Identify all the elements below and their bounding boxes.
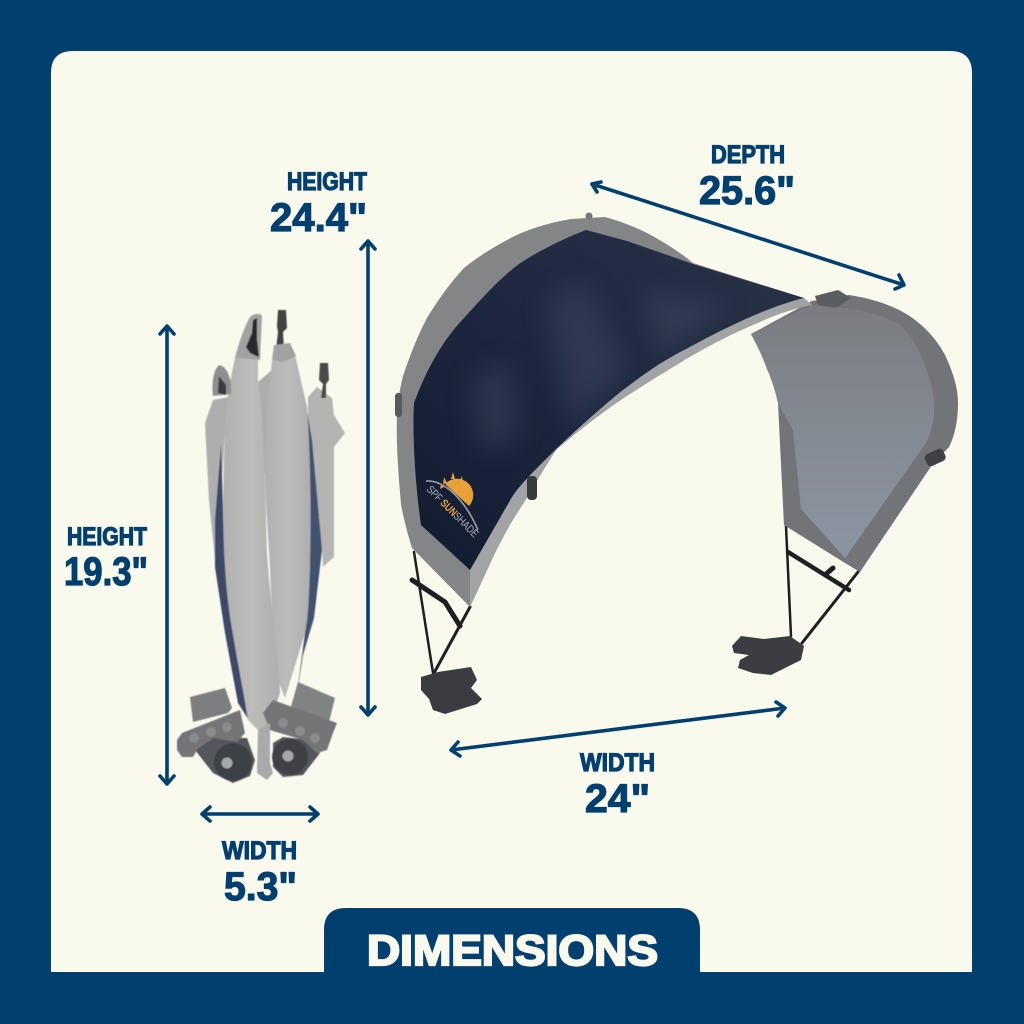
right foot clamp [732, 636, 804, 675]
rear leg [802, 572, 858, 643]
front leg [414, 552, 433, 673]
right main fabric strip [265, 355, 311, 698]
right paddle [290, 682, 335, 730]
arrow: depth [592, 182, 904, 289]
label: folded height: 19.3" [64, 550, 148, 594]
lower front knob [527, 476, 537, 500]
label: folded height [64, 523, 148, 594]
dark navy panel [413, 230, 804, 570]
arrow: folded width [202, 807, 318, 821]
left axle [222, 758, 232, 768]
label: open height: 24.4" [270, 196, 367, 240]
label: open width [580, 749, 655, 821]
right side knob [923, 447, 947, 468]
left wheel housing [195, 738, 255, 783]
left clamp bar [177, 710, 245, 757]
label: open width: WIDTH [580, 749, 655, 777]
label: open width: 24" [585, 777, 650, 821]
left navy lining [215, 445, 250, 722]
lower edge highlight [470, 298, 812, 607]
left canopy gray border [397, 217, 812, 607]
clamps and wheels [177, 682, 337, 783]
right axle [282, 750, 294, 762]
label: folded width: WIDTH [222, 837, 297, 865]
left side knob [395, 393, 402, 417]
label: open height [270, 168, 367, 240]
logo swoosh [426, 481, 478, 530]
clamp teeth [189, 718, 320, 743]
brace [788, 552, 849, 590]
arrow: folded height [160, 326, 174, 784]
title text: DIMENSIONS [367, 927, 658, 975]
back centre fabric strip [258, 370, 272, 480]
right canopy panel inner [751, 305, 934, 558]
zipper pull right [319, 363, 329, 398]
arrow: open width [451, 702, 785, 756]
label: depth: 25.6" [699, 169, 795, 213]
brand logo [424, 472, 480, 540]
logo rays [440, 472, 468, 492]
title tab [324, 908, 700, 975]
right navy lining [296, 405, 322, 700]
back left fabric strip [205, 397, 228, 570]
left small cap [212, 365, 231, 396]
left main fabric strip [223, 358, 280, 730]
back right fabric strip [308, 387, 345, 567]
panel wrinkles [472, 290, 708, 446]
label: folded height: HEIGHT [67, 523, 147, 551]
right legs [786, 526, 858, 643]
logo text: SPF SUNSHADE [424, 484, 480, 540]
right clamp bar [263, 700, 337, 753]
right strip cap [272, 343, 296, 362]
left main top cap [235, 314, 262, 360]
dimension arrows [160, 182, 904, 821]
brace knob [826, 568, 833, 574]
logo sun [445, 479, 473, 506]
rear leg [434, 607, 470, 673]
left foot clamp [421, 667, 482, 714]
label: open height: HEIGHT [287, 168, 367, 196]
open shade product photo [395, 212, 958, 714]
brace [412, 580, 460, 626]
label: depth [699, 141, 795, 213]
cap opening [246, 318, 259, 357]
right canopy panel outer [751, 295, 958, 572]
label: folded width [222, 837, 297, 909]
right wheel [272, 739, 308, 775]
right wheel housing [273, 737, 320, 777]
top hinge [586, 212, 592, 220]
left paddle [190, 688, 232, 722]
label: folded width: 5.3" [224, 865, 297, 909]
zipper pull centre [276, 310, 287, 350]
front leg [786, 526, 791, 636]
right hinge [815, 290, 851, 308]
label: depth: DEPTH [711, 141, 785, 169]
folded shade product photo [177, 310, 345, 783]
centre fabric tip [257, 723, 273, 780]
arrow: open height [361, 241, 375, 715]
left wheel [214, 743, 252, 781]
left legs [412, 552, 470, 673]
